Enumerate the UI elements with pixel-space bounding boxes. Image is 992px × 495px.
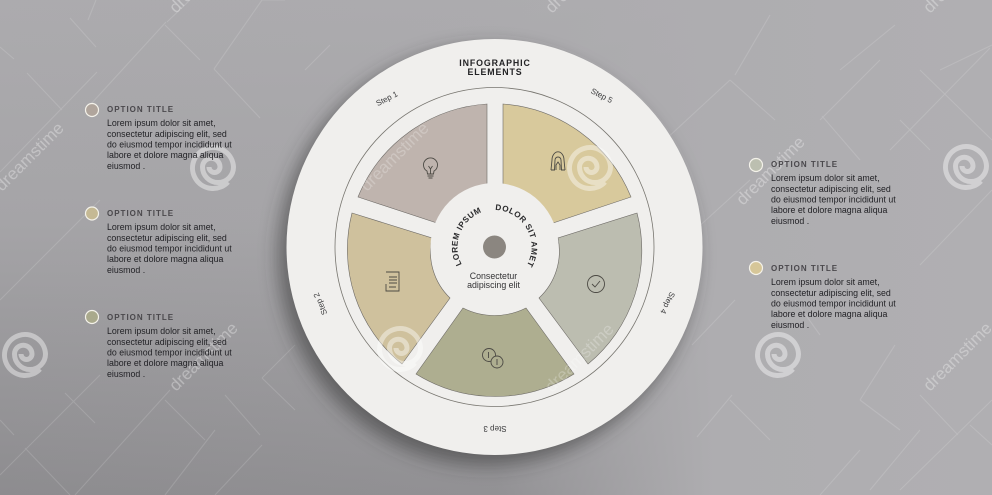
icon: document — [386, 272, 399, 291]
option 4: labore et dolore magna aliqua — [771, 205, 888, 215]
hub curved title: LOREM IPSUM — [452, 207, 481, 266]
option 5: OPTION TITLE — [771, 264, 838, 273]
segment 3 — [416, 308, 574, 396]
option 2: labore et dolore magna aliqua — [107, 254, 224, 264]
option 4: Lorem ipsum dolor sit amet, — [771, 173, 880, 183]
icon: rocket — [551, 152, 565, 170]
option 3 — [86, 310, 232, 379]
option 1 — [86, 104, 232, 171]
segment 4 — [539, 213, 642, 364]
heading: ELEMENTS — [467, 67, 523, 77]
option 1: Lorem ipsum dolor sit amet, — [107, 118, 216, 128]
option 2: OPTION TITLE — [107, 209, 174, 218]
option 3: eiusmod . — [107, 369, 145, 379]
option 4: do eiusmod tempor incididunt ut — [771, 194, 896, 204]
heading — [459, 58, 531, 77]
heading: INFOGRAPHIC — [459, 58, 531, 68]
icon: coins — [482, 348, 503, 368]
option 5: labore et dolore magna aliqua — [771, 309, 888, 319]
option 4: eiusmod . — [771, 216, 809, 226]
option 3: Lorem ipsum dolor sit amet, — [107, 326, 216, 336]
hub curved title: DOLOR SIT AMET — [496, 204, 538, 268]
wheel infographic — [268, 37, 706, 474]
option 2: do eiusmod tempor incididunt ut — [107, 244, 232, 254]
segment 5 — [503, 104, 631, 223]
option 3: OPTION TITLE — [107, 313, 174, 322]
hub caption: adipiscing elit — [467, 280, 520, 290]
option 3: do eiusmod tempor incididunt ut — [107, 348, 232, 358]
option 1: labore et dolore magna aliqua — [107, 150, 224, 160]
hub curved title — [452, 204, 538, 268]
option 3: labore et dolore magna aliqua — [107, 358, 224, 368]
option 1: eiusmod . — [107, 161, 145, 171]
icon: clock — [588, 276, 604, 292]
hub — [430, 183, 558, 311]
option 2 — [86, 207, 232, 275]
option 1: do eiusmod tempor incididunt ut — [107, 140, 232, 150]
step labels: Step 5 — [589, 87, 614, 105]
option 3: consectetur adipiscing elit, sed — [107, 337, 227, 347]
segment watermark text: dreamstime — [356, 119, 433, 195]
option 1: OPTION TITLE — [107, 105, 174, 114]
watermark text: dreamstime — [165, 319, 242, 395]
option 5: Lorem ipsum dolor sit amet, — [771, 277, 880, 287]
option 4: OPTION TITLE — [771, 160, 838, 169]
option 4: consectetur adipiscing elit, sed — [771, 184, 891, 194]
option 5: do eiusmod tempor incididunt ut — [771, 298, 896, 308]
option 5: consectetur adipiscing elit, sed — [771, 288, 891, 298]
option 5 — [750, 262, 896, 330]
step labels: Step 1 — [375, 89, 400, 108]
inner ring — [335, 88, 654, 406]
segment 1 — [358, 104, 487, 223]
icon: light bulb — [424, 158, 438, 178]
watermark text: dreamstime — [732, 133, 809, 209]
option 4 — [750, 158, 896, 226]
step labels — [312, 87, 677, 433]
hub caption: Consectetur — [470, 271, 517, 281]
segment 2 — [347, 213, 450, 364]
step labels: Step 2 — [312, 291, 329, 316]
segment watermark text: dreamstime — [541, 320, 618, 396]
option 2: Lorem ipsum dolor sit amet, — [107, 222, 216, 232]
hub centre dot — [483, 236, 506, 258]
outer disc — [286, 39, 702, 455]
segment watermark text — [356, 119, 618, 396]
watermark text — [0, 0, 992, 395]
option 1: consectetur adipiscing elit, sed — [107, 129, 227, 139]
step labels: Step 4 — [658, 290, 677, 316]
disc shadow — [278, 47, 696, 465]
option 2: consectetur adipiscing elit, sed — [107, 233, 227, 243]
hub caption — [467, 271, 520, 290]
step labels: Step 3 — [483, 424, 507, 433]
spiral watermark over segments — [380, 148, 610, 370]
watermark spirals — [5, 147, 987, 376]
option 5: eiusmod . — [771, 320, 809, 330]
option 2: eiusmod . — [107, 265, 145, 275]
